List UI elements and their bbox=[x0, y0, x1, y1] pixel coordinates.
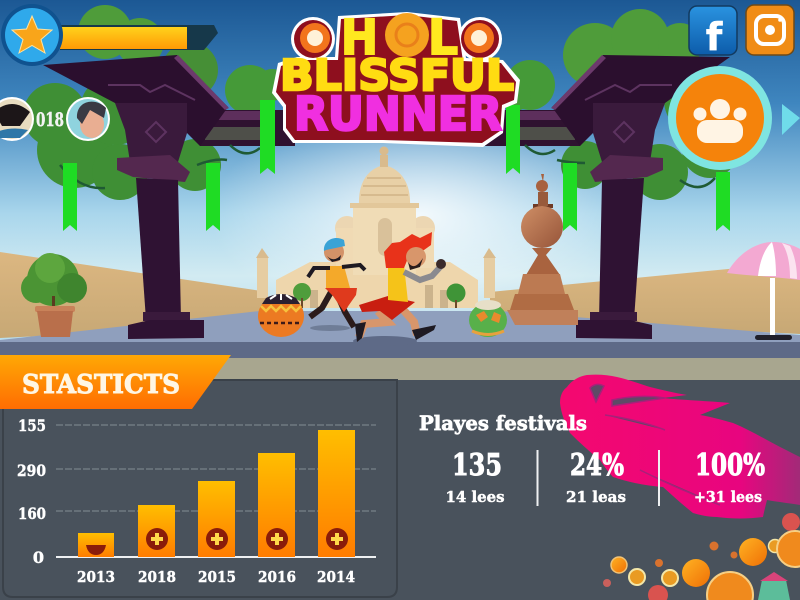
y axis labels: 160 bbox=[18, 504, 46, 523]
beige strip bbox=[0, 358, 800, 380]
left festival pot bbox=[258, 294, 304, 337]
right festival pot bbox=[469, 300, 507, 337]
logo badge right bbox=[464, 23, 494, 53]
stat 135: 135 bbox=[452, 448, 502, 483]
logo word HOL bbox=[341, 10, 458, 66]
patio umbrella bbox=[727, 242, 800, 340]
avatar one bbox=[0, 97, 34, 141]
section banner bbox=[0, 355, 231, 409]
back wall left bbox=[0, 252, 268, 338]
avatar two bbox=[66, 97, 110, 141]
right stone pillar bbox=[485, 55, 730, 339]
back trees bbox=[23, 5, 738, 200]
grid lines bbox=[56, 425, 376, 511]
stat 135: 14 lees bbox=[446, 488, 504, 506]
runner with blue turban bbox=[308, 238, 365, 331]
score bar with star badge bbox=[1, 4, 218, 66]
group icon bbox=[694, 99, 746, 143]
logo word HOL: H bbox=[341, 10, 378, 66]
logo badge left bbox=[300, 23, 330, 53]
instagram button bbox=[746, 5, 794, 55]
green ribbons and vines bbox=[60, 100, 730, 231]
score number: 018 bbox=[36, 109, 64, 131]
stat 100%: 100% bbox=[695, 448, 765, 483]
stat 24% bbox=[566, 448, 626, 506]
logo backing fill bbox=[276, 15, 516, 143]
axis baseline bbox=[56, 556, 376, 558]
bar 2016 bbox=[258, 453, 295, 557]
facebook button bbox=[689, 6, 737, 59]
stats panel background bbox=[0, 380, 800, 600]
group button bbox=[668, 66, 772, 170]
potted tree bbox=[21, 253, 87, 337]
bar 2014 bbox=[318, 430, 355, 557]
runner with red hair bbox=[353, 232, 446, 346]
back wall right bbox=[490, 262, 800, 334]
x axis labels: 2016 bbox=[258, 568, 296, 586]
paint splash bbox=[560, 375, 800, 518]
bar 2013 bbox=[78, 533, 114, 557]
road curb bbox=[0, 342, 800, 359]
logo word RUNNER: RUNNER bbox=[294, 87, 502, 141]
y axis labels: 290 bbox=[17, 461, 46, 480]
finial ornament bbox=[507, 174, 578, 325]
x axis labels bbox=[77, 568, 355, 586]
progress track bbox=[60, 25, 218, 50]
stat 100% bbox=[694, 448, 765, 506]
facebook button: f bbox=[706, 15, 723, 59]
panel: statistics chart bbox=[0, 355, 397, 597]
x axis labels: 2018 bbox=[138, 568, 176, 586]
festive ornaments bbox=[603, 513, 800, 600]
star badge bbox=[1, 4, 63, 66]
left stone pillar bbox=[43, 55, 295, 339]
sky background bbox=[0, 0, 800, 345]
bar 2015 bbox=[198, 481, 235, 557]
stat 135 bbox=[446, 448, 504, 506]
logo word HOL: L bbox=[428, 10, 458, 66]
palace monument bbox=[256, 146, 496, 308]
x axis labels: 2014 bbox=[317, 568, 355, 586]
game logo bbox=[272, 10, 520, 147]
splash streaks bbox=[590, 384, 720, 505]
progress fill bbox=[60, 27, 187, 49]
x axis labels: 2013 bbox=[77, 568, 115, 586]
road bbox=[0, 311, 800, 345]
player avatars and score bbox=[0, 97, 110, 141]
logo word BLISSFUL: BLISSFUL bbox=[280, 51, 514, 101]
y axis labels: 0 bbox=[33, 548, 44, 567]
stat 100%: +31 lees bbox=[694, 488, 762, 506]
next arrow bbox=[782, 104, 800, 135]
bar 2018 bbox=[138, 505, 175, 557]
y axis labels: 155 bbox=[18, 416, 46, 435]
sun glow bbox=[210, 105, 630, 325]
y axis labels bbox=[17, 416, 46, 567]
stat dividers bbox=[538, 450, 659, 506]
logo backing outline bbox=[272, 12, 520, 147]
panel: players festivals bbox=[419, 411, 765, 506]
section banner: STASTICTS bbox=[22, 370, 180, 400]
chart card bbox=[3, 380, 397, 597]
x axis labels: 2015 bbox=[198, 568, 236, 586]
stat 24%: 21 leas bbox=[566, 488, 626, 506]
heading: Playes festivals bbox=[419, 411, 587, 435]
stat 24%: 24% bbox=[570, 448, 624, 483]
